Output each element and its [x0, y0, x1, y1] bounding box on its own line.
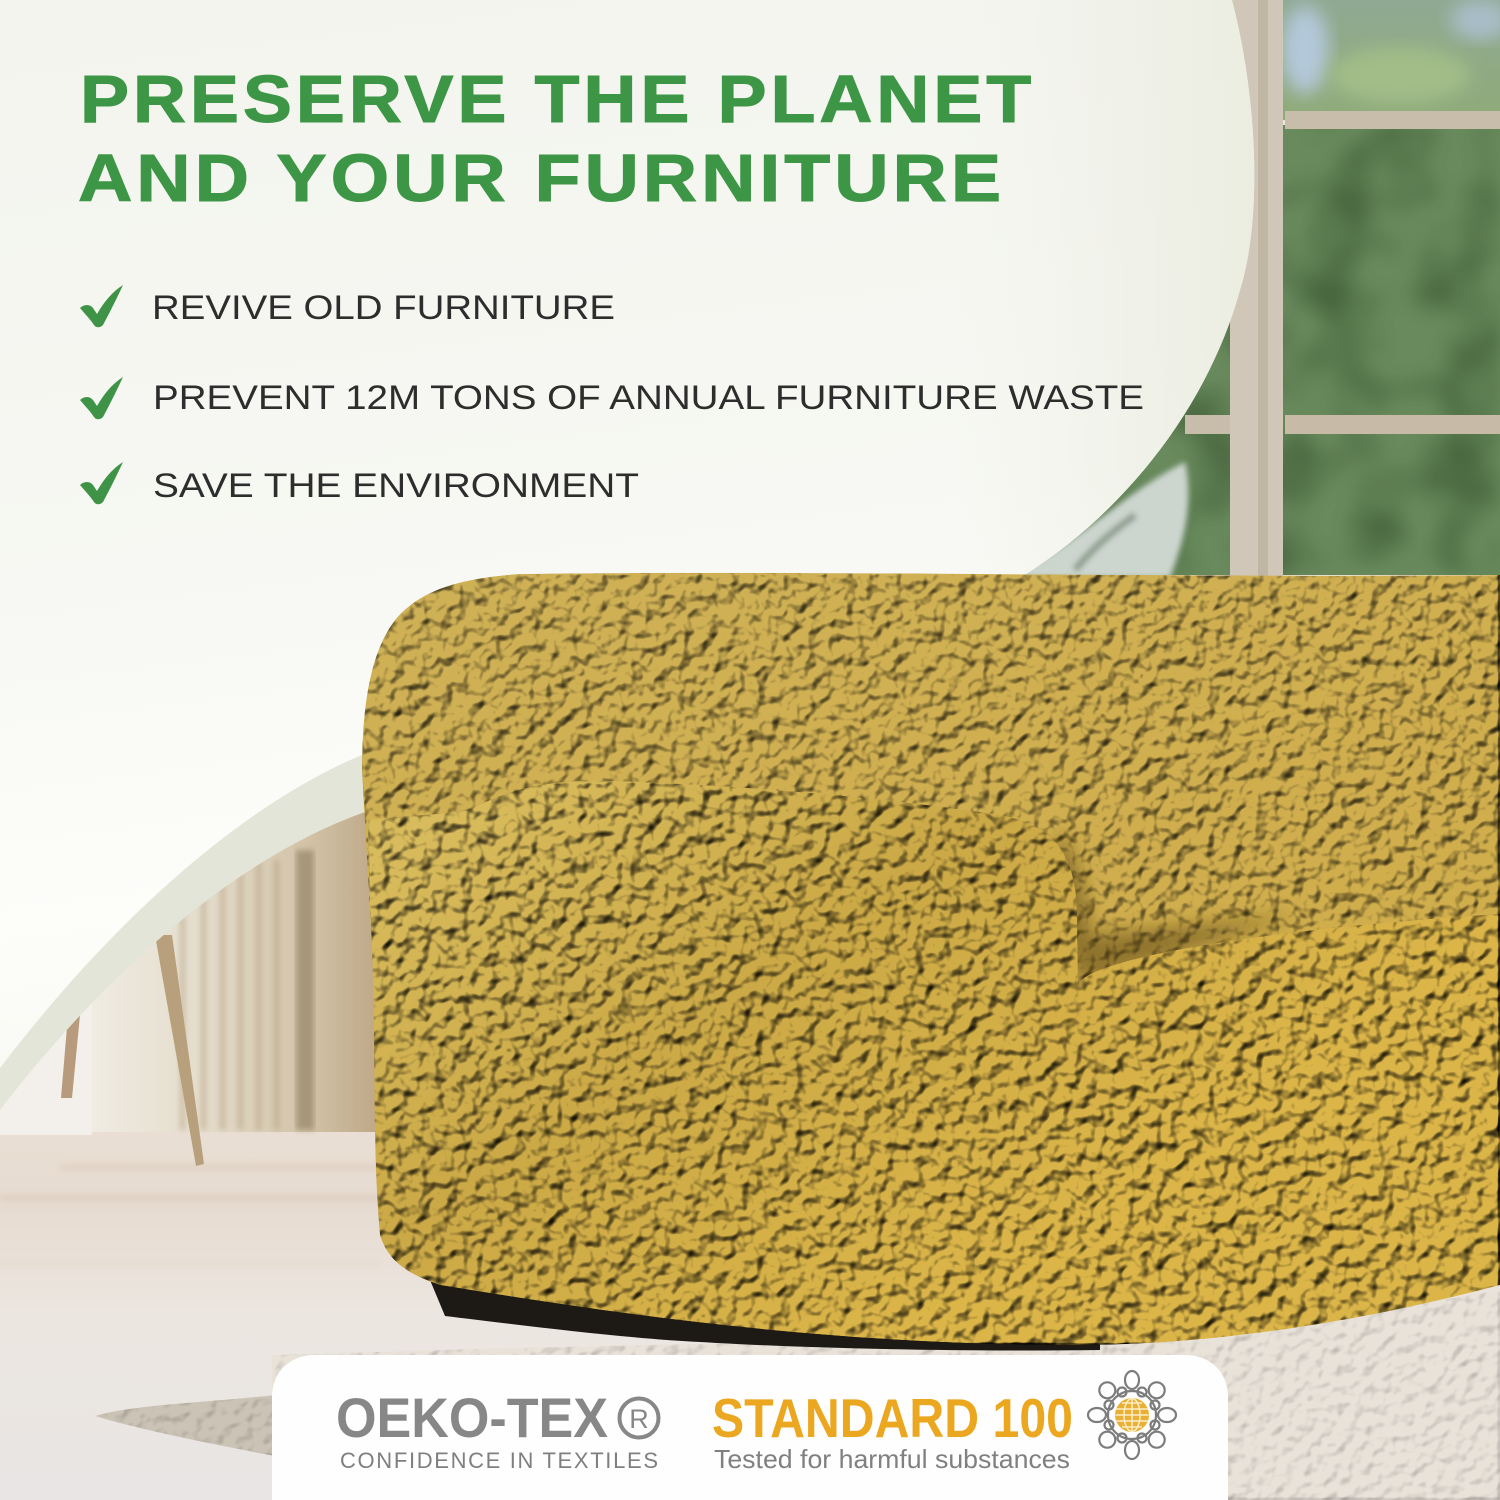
- check icon 1: [80, 285, 123, 327]
- title: PRESERVE THE PLANET: [80, 62, 1035, 137]
- room background wall: [0, 0, 1500, 1140]
- floor plank streaks: [0, 1165, 380, 1266]
- title: AND YOUR FURNITURE: [78, 141, 1005, 216]
- title: [78, 62, 1035, 216]
- check icon 2: [80, 377, 123, 419]
- tagline: CONFIDENCE IN TEXTILES: [340, 1448, 658, 1473]
- OEKO-TEX wordmark: OEKO-TEX: [336, 1386, 608, 1449]
- pale curved band: [0, 755, 365, 1110]
- STANDARD 100: STANDARD 100: [712, 1387, 1073, 1449]
- window view: sky and foliage: [1000, 0, 1500, 575]
- item 2 text: PREVENT 12M TONS OF ANNUAL FURNITURE WASTE: [153, 379, 1144, 417]
- shadow under arm: [1040, 830, 1300, 985]
- blurred plant by window: [1000, 462, 1188, 578]
- item 1 text: REVIVE OLD FURNITURE: [152, 289, 615, 327]
- rug, lower left: [95, 1395, 275, 1456]
- window frame: [1185, 0, 1500, 580]
- white blob panel: [0, 0, 1254, 1068]
- registered mark: R: [629, 1404, 649, 1434]
- sofa back cushion: [362, 573, 1500, 1000]
- floor: [0, 1125, 1500, 1500]
- tested line: Tested for harmful substances: [714, 1444, 1070, 1474]
- sofa: [362, 573, 1500, 1351]
- rug, lower right: [272, 1290, 1500, 1500]
- icon: globe with loops: [1088, 1371, 1176, 1459]
- badge panel: [272, 1355, 1228, 1500]
- chair legs: [61, 935, 204, 1166]
- benefits list: [80, 285, 1144, 505]
- registered mark: [620, 1398, 658, 1438]
- check icon 3: [80, 462, 123, 504]
- certification badge: [272, 1355, 1228, 1500]
- sofa arm, seat and front: [368, 781, 1500, 1345]
- item 3 text: SAVE THE ENVIRONMENT: [153, 467, 639, 505]
- sofa feet shadow: [430, 1270, 1100, 1351]
- ribbed wood wall: [0, 760, 375, 1135]
